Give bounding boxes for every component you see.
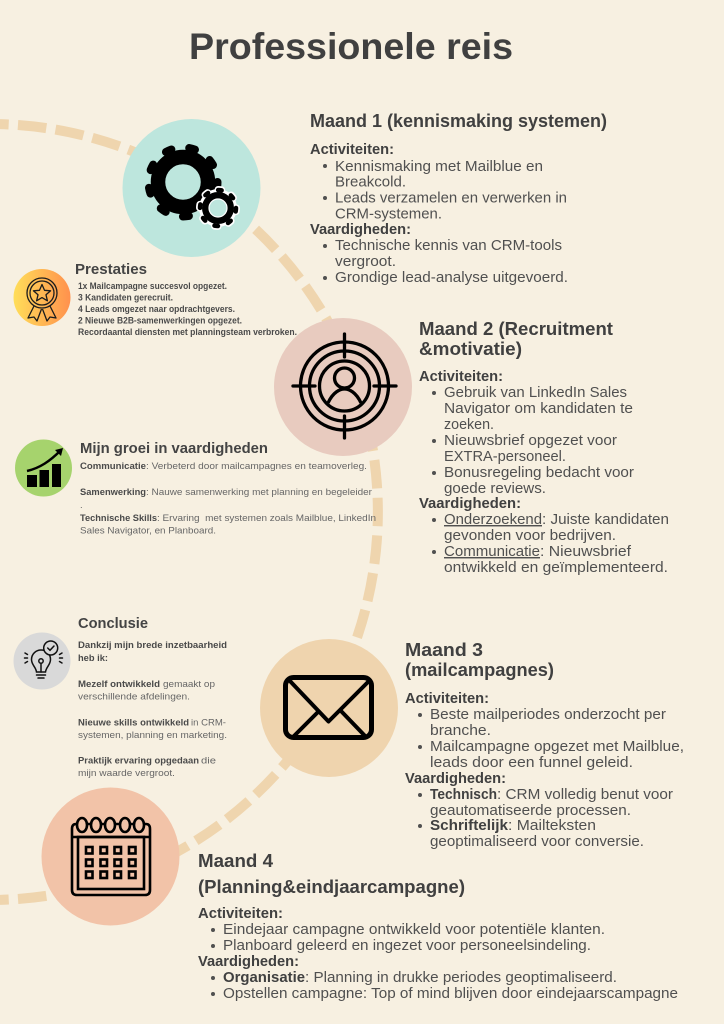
text: conclusie body xyxy=(78,640,227,779)
text: groei body: . xyxy=(80,500,83,511)
panel: maand 1 text: Technische kennis van CRM-tools xyxy=(335,238,562,254)
panel: maand 2 text: : Juiste kandidaten xyxy=(542,512,669,528)
panel: maand 3 text: branche. xyxy=(430,723,491,739)
text: conclusie body: systemen, planning en marketing. xyxy=(78,730,227,741)
text: groei body: Technische Skills xyxy=(80,513,157,524)
heading: maand 3: Maand 3 xyxy=(405,639,483,660)
text: groei body: Communicatie xyxy=(80,461,146,472)
panel: maand 4 text: Opstellen campagne: Top of mind blijven door eindejaarscampagne xyxy=(223,986,678,1002)
panel: maand 3 text xyxy=(405,639,684,850)
heading: maand 4: Maand 4 xyxy=(198,850,274,871)
icon: calendar xyxy=(72,818,150,895)
panel: maand 3 text: Vaardigheden: xyxy=(405,771,506,787)
panel: maand 2 text: : Nieuwsbrief xyxy=(540,544,632,560)
panel: maand 2 text: gevonden voor bedrijven. xyxy=(444,528,616,544)
icon: envelope xyxy=(286,678,372,738)
panel: maand 3 text: Technisch xyxy=(430,787,497,803)
panel: maand 1 text: CRM-systemen. xyxy=(335,206,442,222)
heading: maand 3 xyxy=(405,639,554,680)
panel: maand 3 text: geoptimaliseerd voor conversie. xyxy=(430,834,644,850)
heading: maand 3: (mailcampagnes) xyxy=(405,659,554,680)
panel: maand 3 text: Schriftelijk xyxy=(430,818,509,834)
panel: maand 2 text: Onderzoekend xyxy=(444,512,542,528)
text: groei body: : Ervaring met systemen zoals Mailblue, LinkedIn xyxy=(157,513,376,524)
heading: maand 4 xyxy=(198,850,465,897)
panel: maand 4 text: Organisatie xyxy=(223,970,305,986)
panel: maand 2 text: zoeken. xyxy=(444,417,494,433)
text: conclusie body: gemaakt op xyxy=(163,679,215,690)
heading: conclusie: Conclusie xyxy=(78,616,148,632)
text: prestaties list: 3 Kandidaten gerecruit. xyxy=(78,292,173,302)
panel: maand 4 text: Planboard geleerd en ingezet voor personeelsindeling. xyxy=(223,938,591,954)
panel: maand 3 text: Beste mailperiodes onderzocht per xyxy=(430,707,666,723)
text: conclusie body: Dankzij mijn brede inzetbaarheid xyxy=(78,640,227,651)
text: groei body: : Nauwe samenwerking met planning en begeleider xyxy=(146,487,372,498)
text: groei body xyxy=(80,461,376,536)
text: conclusie body: die xyxy=(201,756,216,766)
panel: maand 1 text: Leads verzamelen en verwerken in xyxy=(335,190,567,206)
panel: maand 2 text: Communicatie xyxy=(444,544,540,560)
panel: maand 2 text xyxy=(419,318,669,576)
panel: maand 1 text xyxy=(310,110,607,286)
panel: maand 4 text xyxy=(198,850,678,1002)
title: Professionele reis xyxy=(189,26,513,67)
text: conclusie body: Praktijk ervaring opgedaan xyxy=(78,756,199,766)
panel: groei in vaardigheden xyxy=(15,440,376,536)
panel: maand 1 text: Activiteiten: xyxy=(310,142,394,158)
panel: maand 2 text: Navigator om kandidaten te xyxy=(444,401,633,417)
heading: maand 2: Maand 2 (Recruitment xyxy=(419,318,613,339)
panel: maand 3 text: Activiteiten: xyxy=(405,691,489,707)
text: prestaties list: 4 Leads omgezet naar opdrachtgevers. xyxy=(78,304,235,314)
panel: maand 2 text: Vaardigheden: xyxy=(419,496,521,512)
panel: maand 1 text: Vaardigheden: xyxy=(310,222,411,238)
heading: maand 2: &motivatie) xyxy=(419,338,522,359)
text: conclusie body: verschillende afdelingen. xyxy=(78,692,190,702)
panel: maand 1 text: Grondige lead-analyse uitgevoerd. xyxy=(335,270,568,286)
panel: conclusie xyxy=(14,616,227,779)
panel: maand 4 text: Eindejaar campagne ontwikkeld voor potentiële klanten. xyxy=(223,922,605,938)
panel: maand 1 text: Breakcold. xyxy=(335,174,406,190)
text: conclusie body: Nieuwe skills ontwikkeld xyxy=(78,718,189,728)
panel: maand 3 text: Mailcampagne opgezet met Mailblue, xyxy=(430,739,684,755)
panel: maand 4 text: : Planning in drukke periodes geoptimaliseerd. xyxy=(305,970,617,986)
icon: target with person xyxy=(293,334,396,438)
text: conclusie body: heb ik: xyxy=(78,653,108,664)
heading: maand 2 xyxy=(419,318,613,359)
icon: growth chart xyxy=(15,440,72,496)
icon: medal xyxy=(14,269,70,326)
panel: maand 2 text: ontwikkeld en geïmplementeerd. xyxy=(444,560,668,576)
panel: maand 1 text: vergroot. xyxy=(335,254,396,270)
icon: gears xyxy=(148,148,237,227)
text: groei body: Samenwerking xyxy=(80,487,146,498)
heading: groei: Mijn groei in vaardigheden xyxy=(80,441,268,457)
text: conclusie body: in CRM- xyxy=(191,718,226,728)
text: prestaties list xyxy=(78,281,297,337)
panel: maand 2 text: EXTRA-personeel. xyxy=(444,449,566,465)
panel: maand 3 text: geautomatiseerde processen. xyxy=(430,803,631,819)
panel: maand 1 node xyxy=(122,119,260,257)
heading: maand 1: Maand 1 (kennismaking systemen) xyxy=(310,110,607,131)
icon: light bulb xyxy=(14,632,70,690)
panel: maand 4 node xyxy=(42,788,180,926)
panel: maand 2 text: Bonusregeling bedacht voor xyxy=(444,465,634,481)
panel: maand 4 text: Vaardigheden: xyxy=(198,954,299,970)
panel: prestaties xyxy=(14,262,297,337)
text: prestaties list: Recordaantal diensten met planningsteam verbroken. xyxy=(78,327,297,337)
panel: maand 3 node xyxy=(260,639,398,777)
panel: maand 2 text: goede reviews. xyxy=(444,481,546,497)
text: prestaties list: 2 Nieuwe B2B-samenwerkingen opgezet. xyxy=(78,316,242,326)
panel: maand 2 text: Gebruik van LinkedIn Sales xyxy=(444,385,627,401)
text: conclusie body: Mezelf ontwikkeld xyxy=(78,679,160,690)
heading: prestaties: Prestaties xyxy=(75,262,147,278)
panel: maand 1 text: Kennismaking met Mailblue en xyxy=(335,159,543,175)
panel: maand 2 text: Activiteiten: xyxy=(419,369,503,385)
text: groei body: Sales Navigator, en Planboard. xyxy=(80,526,216,536)
panel: maand 3 text: leads door een funnel geleid. xyxy=(430,755,633,771)
dashed journey path xyxy=(0,124,378,900)
panel: maand 2 text: Nieuwsbrief opgezet voor xyxy=(444,433,617,449)
panel: maand 4 text: Activiteiten: xyxy=(198,906,283,922)
heading: maand 4: (Planning&eindjaarcampagne) xyxy=(198,876,465,897)
text: conclusie body: mijn waarde vergroot. xyxy=(78,768,175,779)
text: prestaties list: 1x Mailcampagne succesvol opgezet. xyxy=(78,281,227,291)
panel: maand 3 text: : CRM volledig benut voor xyxy=(497,787,673,803)
panel: maand 2 node xyxy=(274,318,412,456)
panel: maand 3 text: : Mailteksten xyxy=(508,818,596,834)
text: groei body: : Verbeterd door mailcampagnes en teamoverleg. xyxy=(146,461,367,472)
